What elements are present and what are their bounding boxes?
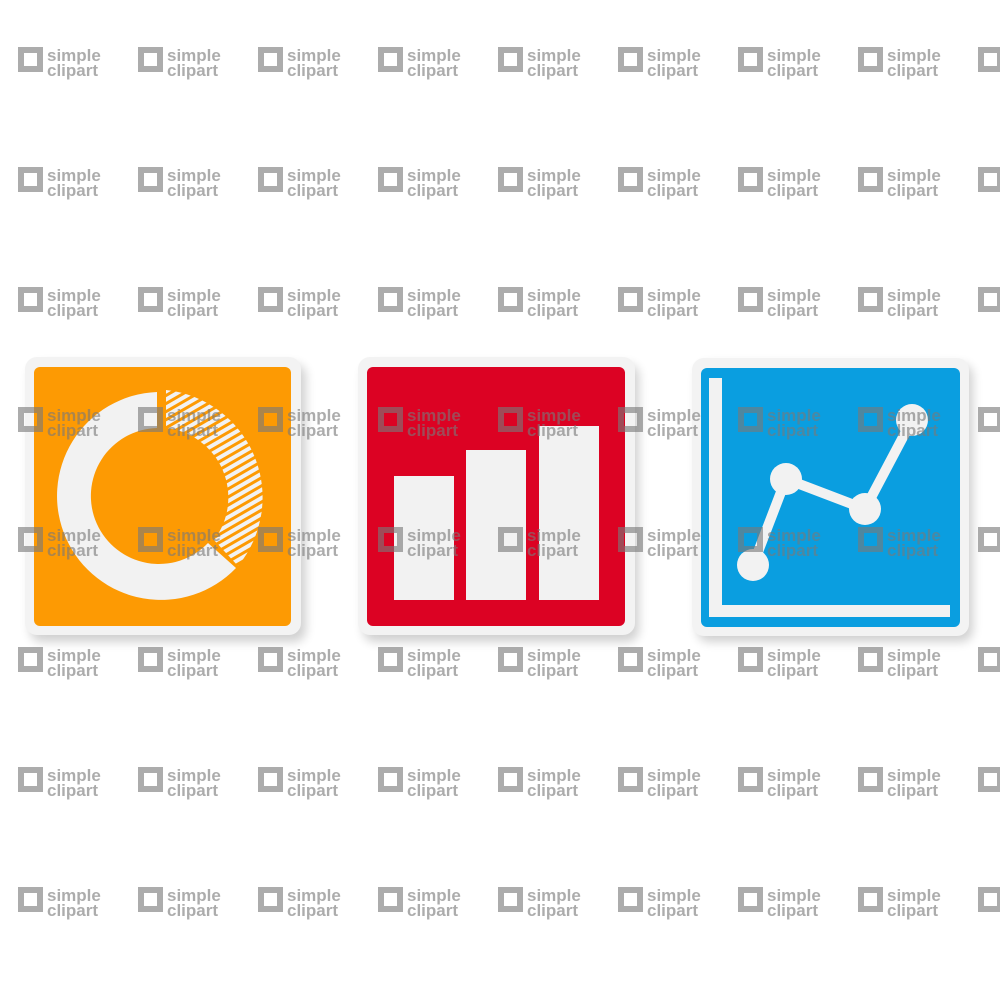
watermark pattern: simple — [767, 526, 821, 545]
watermark pattern: simple — [287, 646, 341, 665]
watermark pattern: simple — [887, 646, 941, 665]
watermark pattern: simple — [167, 166, 221, 185]
watermark pattern: simple — [47, 526, 101, 545]
watermark pattern: clipart — [287, 421, 338, 440]
watermark pattern: simple — [647, 886, 701, 905]
watermark pattern: simple — [767, 646, 821, 665]
watermark pattern: clipart — [287, 181, 338, 200]
watermark pattern: clipart — [287, 61, 338, 80]
watermark pattern: simple — [47, 766, 101, 785]
watermark pattern: simple — [287, 886, 341, 905]
watermark pattern: simple — [527, 766, 581, 785]
watermark pattern: clipart — [287, 541, 338, 560]
watermark pattern: simple — [527, 166, 581, 185]
watermark pattern: clipart — [767, 301, 818, 320]
watermark pattern: simple — [767, 166, 821, 185]
watermark pattern: clipart — [287, 661, 338, 680]
watermark pattern: simple — [47, 646, 101, 665]
watermark pattern: simple — [47, 886, 101, 905]
watermark pattern: clipart — [527, 181, 578, 200]
watermark pattern: clipart — [527, 61, 578, 80]
watermark pattern: clipart — [887, 781, 938, 800]
watermark pattern: simple — [767, 406, 821, 425]
watermark pattern: simple — [647, 766, 701, 785]
watermark pattern: clipart — [407, 781, 458, 800]
watermark pattern: clipart — [767, 421, 818, 440]
watermark pattern: clipart — [47, 541, 98, 560]
watermark pattern: clipart — [407, 181, 458, 200]
watermark pattern: simple — [167, 406, 221, 425]
watermark pattern: simple — [647, 166, 701, 185]
watermark pattern: clipart — [887, 661, 938, 680]
watermark pattern: clipart — [407, 901, 458, 920]
watermark pattern: clipart — [407, 61, 458, 80]
watermark pattern: simple — [167, 646, 221, 665]
watermark pattern: clipart — [887, 541, 938, 560]
watermark pattern: simple — [287, 526, 341, 545]
watermark pattern: simple — [887, 166, 941, 185]
watermark pattern: simple — [167, 286, 221, 305]
watermark pattern: simple — [647, 646, 701, 665]
watermark pattern: simple — [407, 406, 461, 425]
watermark pattern: clipart — [287, 781, 338, 800]
watermark pattern: clipart — [167, 661, 218, 680]
watermark pattern: clipart — [407, 301, 458, 320]
watermark pattern: clipart — [767, 901, 818, 920]
line chart — [709, 378, 950, 617]
watermark pattern: simple — [47, 406, 101, 425]
watermark pattern: clipart — [47, 61, 98, 80]
watermark pattern: clipart — [167, 781, 218, 800]
watermark pattern: simple — [647, 46, 701, 65]
panel: blue line chart card — [692, 358, 973, 642]
watermark pattern: clipart — [887, 421, 938, 440]
watermark pattern: clipart — [647, 61, 698, 80]
watermark pattern: clipart — [527, 661, 578, 680]
watermark pattern: clipart — [647, 781, 698, 800]
watermark pattern: clipart — [47, 781, 98, 800]
watermark pattern: clipart — [767, 181, 818, 200]
watermark pattern: clipart — [527, 781, 578, 800]
watermark pattern: simple — [887, 406, 941, 425]
watermark pattern: clipart — [647, 661, 698, 680]
watermark pattern: simple — [407, 286, 461, 305]
watermark pattern: clipart — [647, 301, 698, 320]
watermark pattern: clipart — [767, 661, 818, 680]
watermark pattern: clipart — [647, 541, 698, 560]
watermark pattern: simple — [527, 406, 581, 425]
watermark pattern: clipart — [527, 901, 578, 920]
watermark pattern: clipart — [167, 901, 218, 920]
watermark pattern: simple — [287, 46, 341, 65]
watermark pattern: clipart — [527, 541, 578, 560]
watermark pattern: clipart — [887, 901, 938, 920]
watermark pattern: simple — [287, 766, 341, 785]
watermark pattern: clipart — [527, 301, 578, 320]
watermark pattern: simple — [527, 286, 581, 305]
watermark pattern: clipart — [167, 301, 218, 320]
watermark pattern: simple — [767, 766, 821, 785]
watermark pattern: clipart — [767, 541, 818, 560]
watermark pattern: simple — [887, 46, 941, 65]
watermark pattern: simple — [407, 166, 461, 185]
watermark pattern: simple — [887, 766, 941, 785]
watermark pattern: clipart — [647, 901, 698, 920]
watermark pattern: simple — [527, 646, 581, 665]
watermark pattern: simple — [407, 766, 461, 785]
watermark pattern: simple — [287, 166, 341, 185]
watermark pattern: clipart — [527, 421, 578, 440]
watermark pattern: clipart — [47, 421, 98, 440]
watermark pattern: clipart — [287, 901, 338, 920]
watermark pattern: simple — [767, 286, 821, 305]
watermark pattern: clipart — [407, 421, 458, 440]
watermark pattern: simple — [407, 886, 461, 905]
watermark pattern: simple — [527, 46, 581, 65]
watermark pattern: clipart — [47, 661, 98, 680]
watermark pattern: clipart — [647, 181, 698, 200]
watermark pattern: clipart — [47, 901, 98, 920]
watermark pattern: simple — [767, 886, 821, 905]
watermark pattern: simple — [47, 166, 101, 185]
watermark pattern: simple — [647, 526, 701, 545]
watermark pattern: clipart — [167, 541, 218, 560]
watermark pattern: simple — [167, 526, 221, 545]
watermark pattern: clipart — [407, 661, 458, 680]
watermark pattern: simple — [287, 406, 341, 425]
watermark pattern: clipart — [167, 181, 218, 200]
watermark pattern: simple — [647, 406, 701, 425]
watermark pattern: simple — [647, 286, 701, 305]
watermark pattern: clipart — [647, 421, 698, 440]
watermark pattern: clipart — [167, 421, 218, 440]
watermark pattern: simple — [47, 46, 101, 65]
icon: donut chart — [57, 390, 263, 600]
watermark pattern: simple — [887, 526, 941, 545]
watermark pattern: simple — [47, 286, 101, 305]
watermark pattern: clipart — [887, 301, 938, 320]
watermark pattern: clipart — [47, 301, 98, 320]
watermark pattern: simple — [287, 286, 341, 305]
watermark pattern: simple — [527, 526, 581, 545]
watermark pattern: clipart — [287, 301, 338, 320]
watermark pattern: clipart — [887, 181, 938, 200]
watermark pattern: simple — [887, 886, 941, 905]
watermark pattern: clipart — [47, 181, 98, 200]
bar chart — [394, 426, 599, 600]
watermark pattern: simple — [887, 286, 941, 305]
watermark pattern: simple — [407, 646, 461, 665]
watermark pattern: simple — [167, 766, 221, 785]
watermark pattern: simple — [167, 886, 221, 905]
watermark pattern: simple — [527, 886, 581, 905]
watermark pattern: clipart — [167, 61, 218, 80]
watermark pattern: simple — [407, 46, 461, 65]
watermark pattern: clipart — [887, 61, 938, 80]
watermark pattern: clipart — [767, 61, 818, 80]
watermark pattern: clipart — [407, 541, 458, 560]
watermark pattern: simple — [407, 526, 461, 545]
watermark pattern: simple — [167, 46, 221, 65]
panel: red bar chart card — [358, 357, 639, 642]
watermark pattern: simple — [767, 46, 821, 65]
watermark pattern: clipart — [767, 781, 818, 800]
panel: orange pie chart card — [25, 357, 306, 642]
